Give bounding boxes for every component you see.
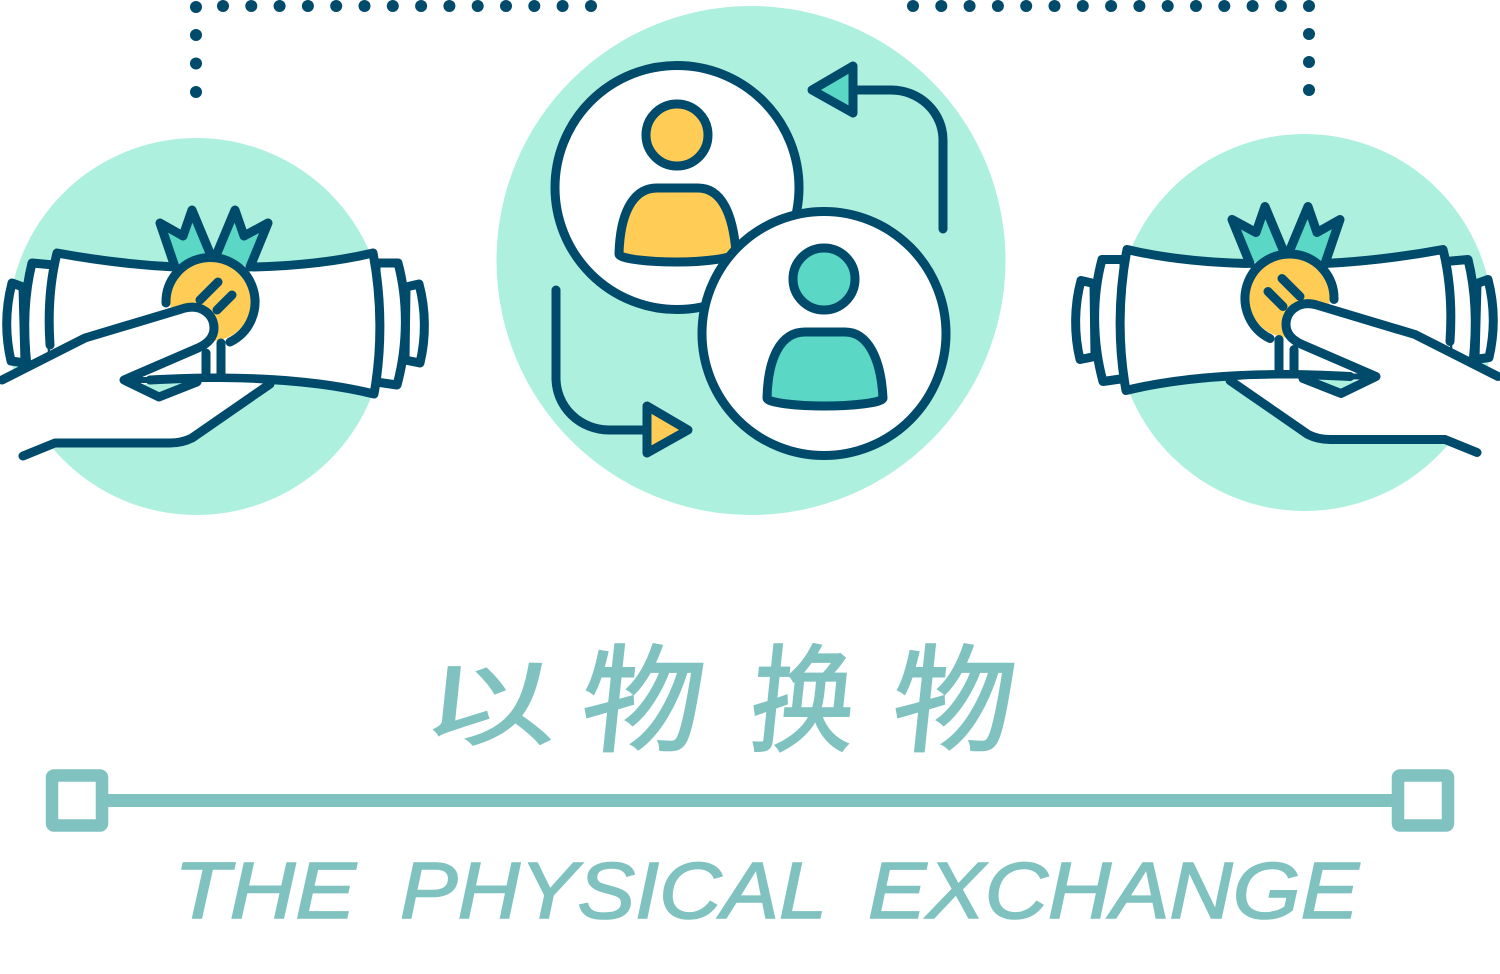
- divider with end squares: [52, 776, 1448, 826]
- subtitle: english: THE: [174, 846, 358, 935]
- subtitle: english: PHYSICAL: [400, 846, 827, 935]
- background circle: left: [8, 138, 385, 515]
- icon: people exchange: [496, 6, 1006, 515]
- ribbon: left tail: [160, 210, 212, 267]
- ribbon: right tail: [215, 210, 268, 267]
- title: chinese: 以: [418, 655, 563, 757]
- scroll body: [1120, 250, 1451, 416]
- icon: right hand passing scroll: [1076, 134, 1500, 511]
- title: chinese: [418, 638, 1022, 767]
- person B: [702, 212, 946, 456]
- ribbon: tail two: [1232, 206, 1285, 264]
- coin seal: [1245, 254, 1334, 374]
- subtitle: english: EXCHANGE: [868, 846, 1361, 935]
- title: chinese: 换: [744, 638, 862, 767]
- coin seal: [166, 258, 255, 377]
- hand: [0, 307, 270, 456]
- background circle: center: [496, 6, 1006, 515]
- ribbon: tail one: [1288, 206, 1340, 264]
- hand: [1230, 304, 1500, 452]
- dotted connector: left: [190, 0, 597, 98]
- title: chinese: 物: [886, 638, 1022, 767]
- scroll rolled ends: inner side: [1076, 260, 1124, 382]
- scroll rolled ends: outer side: [1446, 260, 1493, 362]
- scroll body: [49, 253, 380, 420]
- background circle: right: [1116, 134, 1493, 511]
- arrow: bottom left: [556, 290, 688, 453]
- dotted connector: right: [907, 0, 1315, 96]
- subtitle: english: [174, 846, 1361, 935]
- arrow: top right: [812, 66, 943, 229]
- person A: [555, 66, 799, 310]
- title: chinese: 物: [575, 638, 711, 767]
- scroll rolled ends: right side: [376, 263, 424, 385]
- scroll rolled ends: left side: [7, 263, 54, 366]
- icon: left hand passing scroll: [0, 138, 424, 515]
